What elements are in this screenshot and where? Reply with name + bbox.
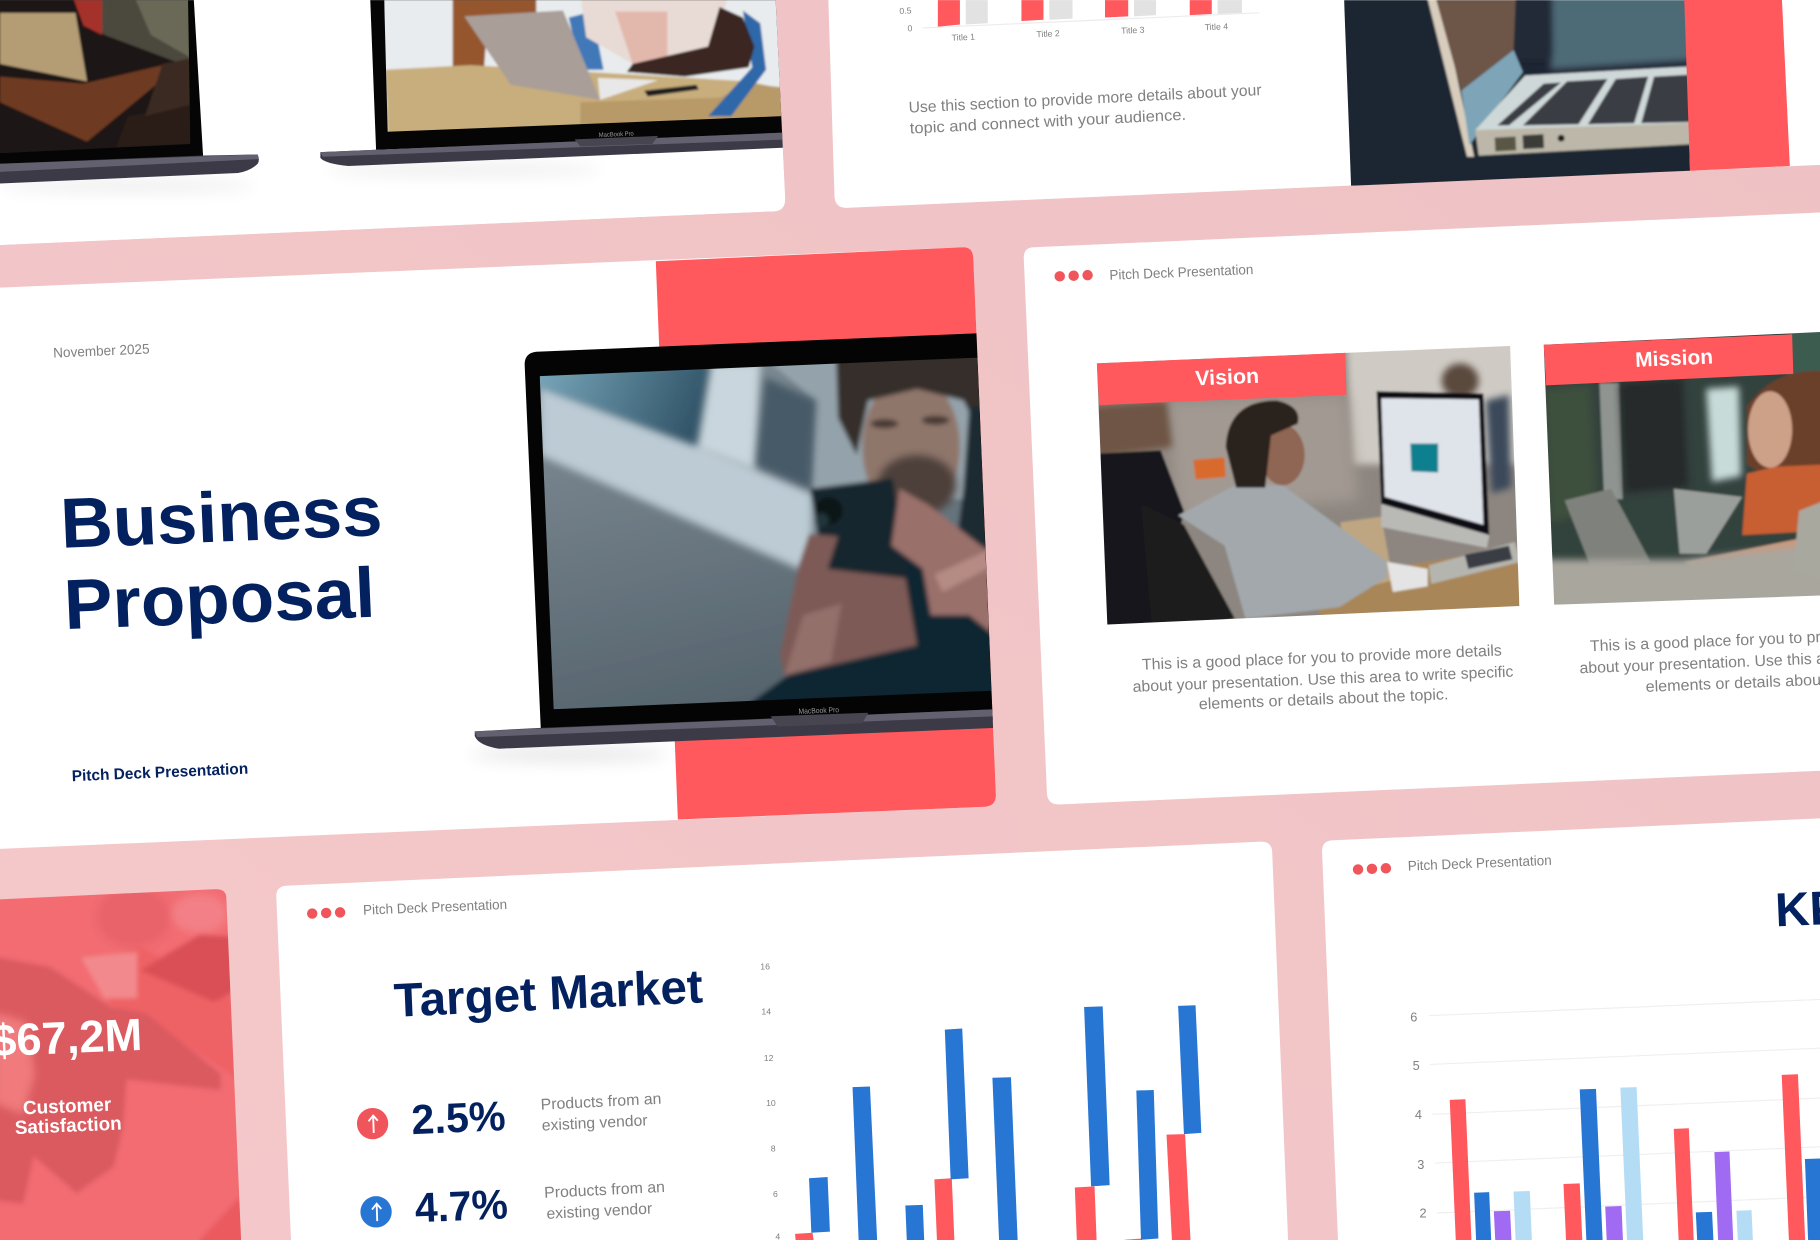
panel: target market slide bbox=[276, 842, 1288, 1240]
grouped bar chart bbox=[1410, 999, 1820, 1240]
vision text bbox=[1132, 642, 1514, 713]
bar chart: titles: 0.5 bbox=[899, 5, 912, 16]
vision text: about your presentation. Use this area to write specific bbox=[1132, 664, 1514, 696]
stacked bar chart: 16 bbox=[760, 961, 770, 971]
accent strip: red bbox=[1684, 0, 1790, 171]
mission header: Mission bbox=[1635, 346, 1713, 372]
bar chart: titles bbox=[899, 0, 1259, 43]
panel: laptop slide top left bbox=[0, 0, 795, 245]
panel: vision and mission slide bbox=[1024, 212, 1820, 804]
bar chart: titles: Title 3 bbox=[1121, 25, 1145, 36]
metric: 2.5%: Products from an bbox=[540, 1091, 662, 1114]
laptop base: phone user bbox=[475, 709, 996, 749]
bar chart: titles: 0 bbox=[907, 23, 913, 33]
laptop shadow bbox=[470, 748, 667, 761]
slide header bbox=[307, 896, 507, 919]
stacked bar chart: 14 bbox=[761, 1007, 771, 1017]
panel: title slide bbox=[0, 247, 1010, 849]
metric: 4.7%: 4.7% bbox=[414, 1180, 509, 1231]
laptop shadows bbox=[52, 164, 547, 192]
text block: chart description: topic and connect with your audience. bbox=[909, 107, 1186, 138]
grouped bar chart: 4 bbox=[1415, 1107, 1422, 1122]
laptop mockup: left bbox=[0, 0, 259, 183]
vision header bbox=[1097, 353, 1346, 405]
laptop base: centre bbox=[320, 132, 789, 166]
panel: chart slide top right bbox=[828, 0, 1820, 208]
text block: chart description: Use this section to provide more details about your bbox=[908, 82, 1262, 117]
photo: mission bbox=[1544, 332, 1820, 605]
slide header: Pitch Deck Presentation bbox=[363, 896, 507, 918]
bar chart: titles: Title 4 bbox=[1204, 21, 1228, 32]
text block: chart description bbox=[908, 82, 1262, 138]
vision text: This is a good place for you to provide more details bbox=[1142, 642, 1502, 674]
heading: Target Market: Target Market bbox=[393, 960, 704, 1028]
slide header: Pitch Deck Presentation bbox=[1407, 852, 1552, 874]
stat label: customer satisfaction bbox=[14, 1095, 122, 1139]
bar chart: titles: Title 1 bbox=[951, 32, 975, 43]
metric: 4.7% bbox=[360, 1179, 665, 1231]
slide header: Pitch Deck Presentation bbox=[1109, 261, 1254, 283]
subtitle: Pitch Deck Presentation: Pitch Deck Presentation bbox=[71, 761, 249, 785]
stat label: customer satisfaction: Customer bbox=[23, 1095, 112, 1119]
bar chart: titles: Title 2 bbox=[1036, 28, 1060, 39]
laptop mockup: centre bbox=[320, 0, 795, 166]
metric: 4.7%: existing vendor bbox=[546, 1201, 652, 1223]
grouped bar chart: 2 bbox=[1420, 1206, 1427, 1221]
grouped bar chart: 6 bbox=[1410, 1009, 1417, 1024]
stat label: customer satisfaction: Satisfaction bbox=[14, 1114, 122, 1139]
laptop mockup: phone user bbox=[475, 333, 1010, 749]
panel: KPI slide bbox=[1322, 818, 1820, 1240]
title: Business Proposal: Proposal bbox=[62, 554, 377, 645]
photo: laptop close-up bbox=[1335, 0, 1700, 192]
date: November 2025 bbox=[53, 340, 150, 361]
panel: customer satisfaction stat bbox=[0, 889, 242, 1240]
grouped bar chart: 5 bbox=[1413, 1058, 1420, 1073]
title: Business Proposal: Business bbox=[59, 472, 384, 564]
photo: vision bbox=[1097, 346, 1520, 624]
metric: 2.5%: existing vendor bbox=[541, 1112, 648, 1135]
mission text bbox=[1579, 624, 1820, 696]
stacked bar chart: 6 bbox=[773, 1189, 778, 1199]
vision header: Vision bbox=[1195, 365, 1260, 390]
icon: blue up arrow bbox=[360, 1196, 392, 1228]
grouped bar chart: 3 bbox=[1417, 1157, 1424, 1172]
metric: 2.5%: 2.5% bbox=[410, 1092, 506, 1143]
laptop label: MacBook Pro: MacBook Pro bbox=[798, 705, 839, 716]
mission header bbox=[1544, 334, 1793, 385]
laptop label: MacBook Pro: MacBook Pro bbox=[599, 131, 634, 139]
icon: red up arrow bbox=[357, 1108, 388, 1139]
slide header bbox=[1353, 852, 1552, 875]
stacked bar chart: 12 bbox=[764, 1053, 774, 1063]
stacked bar chart: 10 bbox=[766, 1098, 776, 1108]
title: Business Proposal bbox=[59, 472, 384, 645]
vision text: elements or details about the topic. bbox=[1198, 686, 1449, 713]
laptop base: left bbox=[0, 154, 259, 183]
laptop screen photo bbox=[540, 358, 992, 710]
metric: 2.5% bbox=[357, 1091, 662, 1143]
accent block: red bbox=[656, 247, 996, 820]
stacked bar chart: 8 bbox=[771, 1143, 776, 1153]
stacked bar chart bbox=[760, 961, 1201, 1240]
metric: 4.7%: Products from an bbox=[544, 1179, 665, 1202]
